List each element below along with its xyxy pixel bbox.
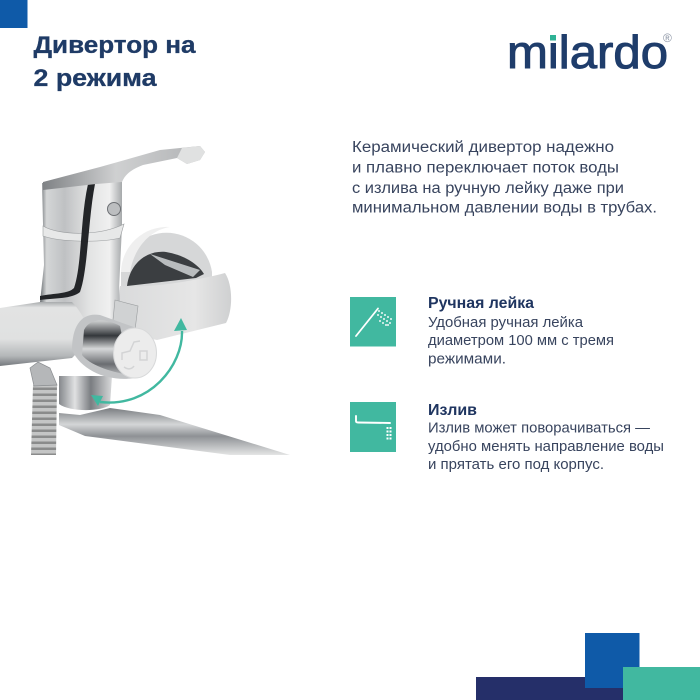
lever handle [43,146,205,190]
intro paragraph [352,139,657,216]
teal rotation arrow [91,318,187,406]
main faucet body [40,180,122,345]
diverter lever tab [113,300,138,330]
text: hand shower: диаметром 100 мм с тремя [428,333,614,349]
horizontal pipe [0,298,100,366]
text: spout: и прятать его под корпус. [428,457,604,473]
title: Дивертор на [34,32,196,59]
faucet photo illustration [0,146,290,455]
corner blocks bottom right [476,633,700,700]
intro paragraph: Керамический дивертор надежно [352,139,614,156]
text: hand shower: Удобная ручная лейка [428,315,584,331]
intro paragraph: минимальном давлении воды в трубах. [352,200,657,216]
diverter housing [72,315,142,379]
heading: spout: Излив [428,402,477,419]
diverter cylinder [82,320,130,375]
spout [59,408,290,455]
wall flange [121,227,212,290]
intro paragraph: с излива на ручную лейку даже при [352,180,624,197]
hose connector [30,362,57,386]
set screw [108,202,120,216]
text: spout [428,420,664,473]
hose [31,385,57,455]
text: spout: Излив может поворачиваться — [428,420,651,436]
title [34,32,196,92]
icon: hand shower [350,297,396,346]
title: 2 режима [34,65,157,92]
body dark seam [40,184,95,300]
right body housing [110,273,231,340]
text: hand shower [428,315,614,368]
logo: milardo: milardo [507,26,668,78]
corner square top left [0,0,28,28]
intro paragraph: и плавно переключает поток воды [352,160,619,176]
heading: hand shower: Ручная лейка [428,295,534,312]
text: spout: удобно менять направление воды [428,439,664,455]
logo: milardo: ® [663,31,672,45]
lower collar [59,376,112,410]
diverter knob [114,328,156,378]
text: hand shower: режимами. [428,352,506,368]
body collar [43,224,124,241]
lever tip [177,146,205,164]
icon: spout [350,402,396,452]
